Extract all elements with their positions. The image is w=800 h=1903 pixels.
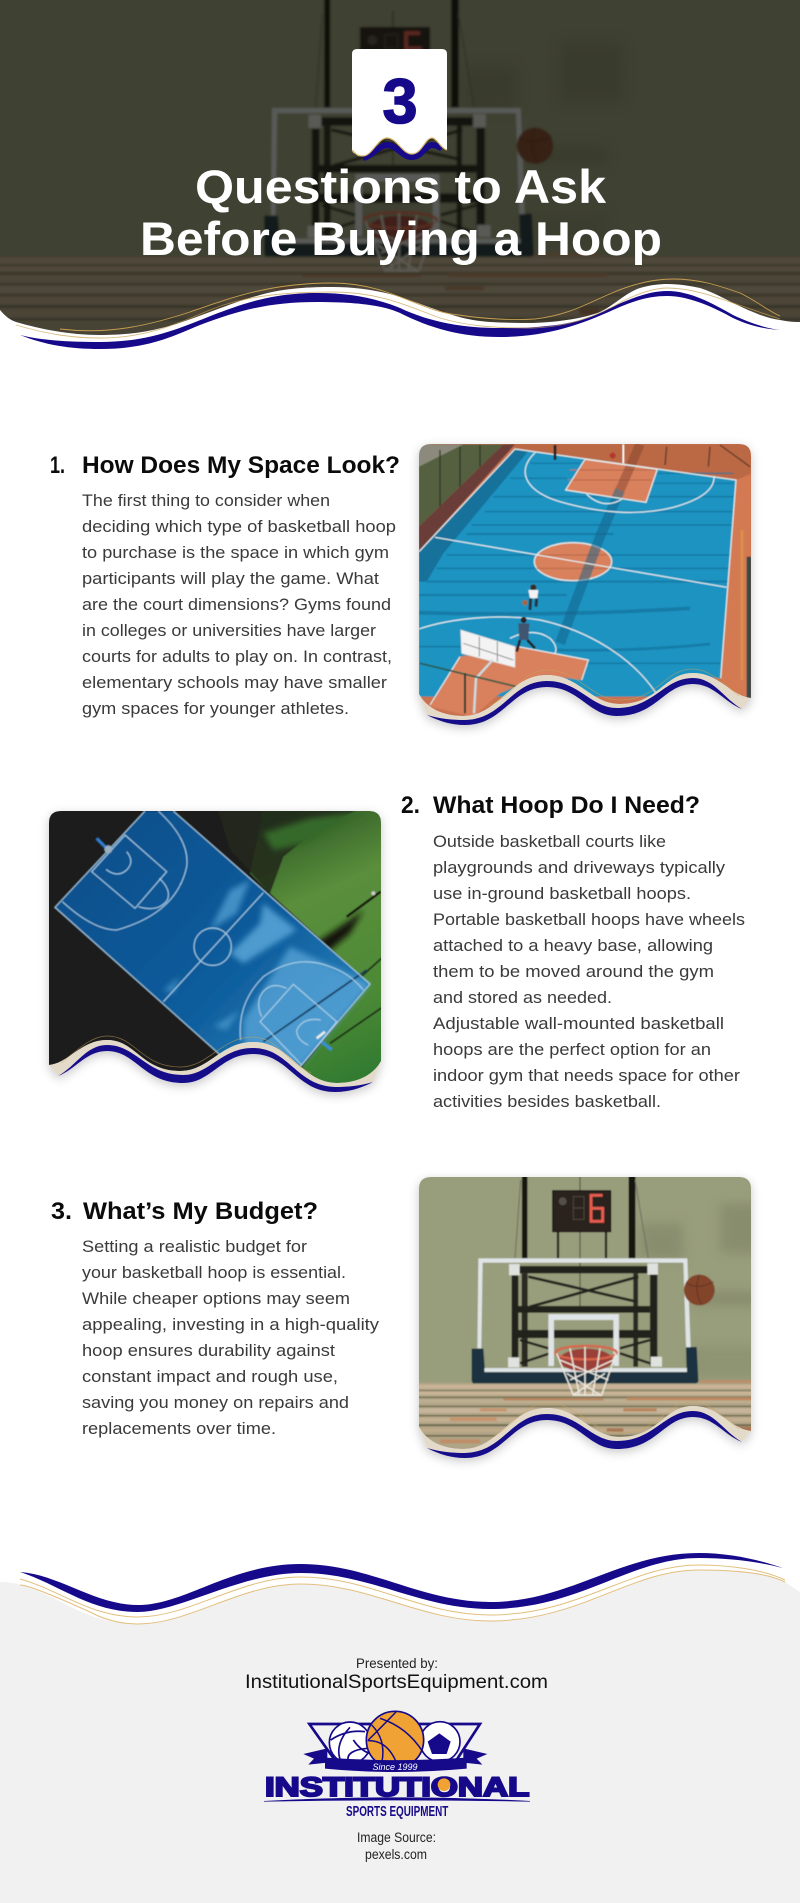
image source label: Image Source:: [357, 1830, 436, 1845]
section 3 text: [51, 1198, 380, 1438]
section 3 text: 3.: [51, 1198, 72, 1225]
section 2 text: Outside basketball courts like: [433, 832, 666, 851]
section 2 text: 2.: [401, 792, 420, 819]
header photo: darkened backboard: [0, 0, 800, 335]
title: [140, 160, 662, 265]
footer wave: gold lines: [20, 1565, 785, 1624]
footer gray wave background: [0, 1570, 800, 1903]
header wave: blue ribbon: [20, 291, 780, 349]
section 1 text: courts for adults to play on. In contrast,: [82, 647, 392, 666]
card 3 wave ribbon: [419, 1402, 751, 1458]
section 3 text: While cheaper options may seem: [82, 1289, 350, 1308]
photo card 1: outdoor court: [413, 440, 757, 727]
section 1 text: elementary schools may have smaller: [82, 673, 387, 692]
photo card 3: indoor hoop: [414, 1175, 756, 1466]
section 1 text: deciding which type of basketball hoop: [82, 517, 396, 536]
title: Questions to Ask: [195, 160, 607, 213]
section 1 text: [50, 452, 400, 718]
header panel: [0, 0, 800, 349]
badge with number 3: 3: [382, 67, 418, 137]
image source: pexels.com: [365, 1847, 427, 1862]
section 1 text: gym spaces for younger athletes.: [82, 699, 349, 718]
section 1 text: to purchase is the space in which gym: [82, 543, 389, 562]
footer wave: blue ribbon: [20, 1553, 783, 1612]
website: InstitutionalSportsEquipment.com: [245, 1671, 548, 1693]
section 3 text: What’s My Budget?: [83, 1198, 318, 1225]
section 1 text: in colleges or universities have larger: [82, 621, 376, 640]
section 2 text: attached to a heavy base, allowing: [433, 936, 713, 955]
logo: Institutional Sports Equipment: SPORTS EQUIPMENT: [346, 1803, 448, 1820]
section 1 text: 1.: [50, 452, 65, 479]
section 1 text: participants will play the game. What: [82, 569, 379, 588]
section 1 text: are the court dimensions? Gyms found: [82, 595, 391, 614]
section 2 text: What Hoop Do I Need?: [433, 792, 700, 819]
logo: Institutional Sports Equipment: [264, 1711, 530, 1820]
section 2 text: them to be moved around the gym: [433, 962, 714, 981]
section 2 text: Adjustable wall-mounted basketball: [433, 1014, 724, 1033]
section 2 text: activities besides basketball.: [433, 1092, 661, 1111]
section 3 text: constant impact and rough use,: [82, 1367, 338, 1386]
logo: Institutional Sports Equipment: INSTITUTIONAL: [265, 1772, 529, 1802]
section 2 text: Portable basketball hoops have wheels: [433, 910, 745, 929]
badge with number 3: [352, 49, 447, 158]
section 3 text: saving you money on repairs and: [82, 1393, 349, 1412]
section 3 text: appealing, investing in a high-quality: [82, 1315, 380, 1334]
section 2 text: use in-ground basketball hoops.: [433, 884, 691, 903]
section 3 text: your basketball hoop is essential.: [82, 1263, 346, 1282]
section 2 text: and stored as needed.: [433, 988, 612, 1007]
section 1 text: How Does My Space Look?: [82, 452, 400, 479]
card 1 wave ribbon: [419, 669, 751, 725]
header wave: white edge: [0, 284, 800, 400]
section 3 text: Setting a realistic budget for: [82, 1237, 307, 1256]
card 2 wave ribbon: [49, 1036, 381, 1092]
section 2 text: indoor gym that needs space for other: [433, 1066, 740, 1085]
section 2 text: hoops are the perfect option for an: [433, 1040, 711, 1059]
section 3 text: hoop ensures durability against: [82, 1341, 335, 1360]
presented by: Presented by:: [356, 1656, 438, 1671]
title: Before Buying a Hoop: [140, 212, 662, 265]
section 3 text: replacements over time.: [82, 1419, 276, 1438]
section 1 text: The first thing to consider when: [82, 491, 330, 510]
logo: Institutional Sports Equipment: Since 1999: [373, 1762, 417, 1772]
photo card 2: aerial court: [43, 807, 387, 1101]
header wave: gold lines: [16, 279, 780, 338]
section 2 text: [401, 792, 745, 1111]
footer panel: [0, 1553, 800, 1903]
section 2 text: playgrounds and driveways typically: [433, 858, 726, 877]
